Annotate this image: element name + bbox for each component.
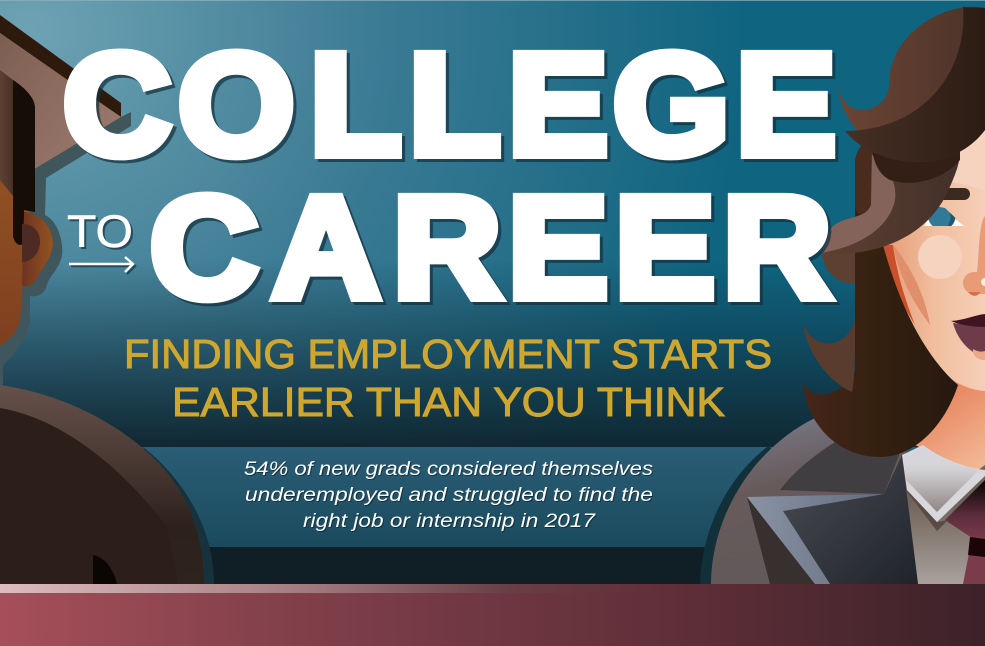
man body shadow: [143, 447, 214, 584]
hair strand: [855, 146, 872, 214]
inner torso: [0, 408, 156, 514]
jacket shadow: [700, 446, 771, 584]
jacket inner shade: [780, 440, 905, 494]
jacket: [711, 418, 918, 584]
collar inner: [904, 447, 979, 512]
cap top: [0, 15, 121, 117]
lower curl: [803, 320, 855, 392]
title: career: CAREER: [150, 168, 831, 328]
arrow: [69, 257, 133, 272]
collar: [902, 445, 985, 522]
face: [888, 182, 985, 391]
hair: [0, 70, 35, 245]
title: college: COLLEGE: [63, 25, 836, 185]
bottom bar highlight: [0, 584, 700, 593]
neck: [916, 379, 985, 470]
subtitle: EARLIER THAN YOU THINK: [172, 379, 725, 425]
collar shadow: [907, 490, 948, 531]
eyebrow: [940, 188, 970, 200]
lips: [951, 314, 985, 360]
body text: underemployed and struggled to find the: [245, 485, 653, 506]
sheet highlight: [822, 155, 895, 253]
hair band: [872, 152, 960, 183]
text band: [0, 447, 985, 584]
lapel edge: [747, 494, 884, 584]
main hair: [803, 140, 958, 457]
lobe: [822, 252, 855, 284]
shoulder: [0, 385, 204, 584]
body text: right job or internship in 2017: [303, 511, 597, 532]
man head shadow: [0, 100, 131, 390]
hair sheet: [822, 150, 960, 254]
top hair blob: [838, 7, 985, 162]
head: [0, 180, 30, 346]
inner ear: [22, 224, 40, 262]
cheek: [918, 235, 962, 279]
tie band: [968, 537, 985, 557]
tie: [945, 480, 985, 584]
subtitle: [124, 331, 772, 425]
cap board: [0, 33, 121, 190]
cheek shading: [883, 245, 915, 325]
lapel notch: [93, 555, 117, 584]
lapel inner: [783, 455, 918, 584]
nose: [963, 216, 985, 296]
body text: [244, 459, 654, 532]
top hair shade: [845, 7, 985, 162]
bottom bar: [0, 584, 985, 646]
lapel shadow: [747, 497, 815, 584]
shirt: [902, 462, 985, 584]
ear: [22, 212, 53, 286]
woman illustration: [700, 7, 985, 584]
man illustration: [0, 15, 214, 584]
to label: TO: [67, 206, 133, 257]
subtitle: FINDING EMPLOYMENT STARTS: [124, 331, 772, 377]
body text: 54% of new grads considered themselves: [244, 459, 654, 480]
eye: [924, 206, 964, 226]
